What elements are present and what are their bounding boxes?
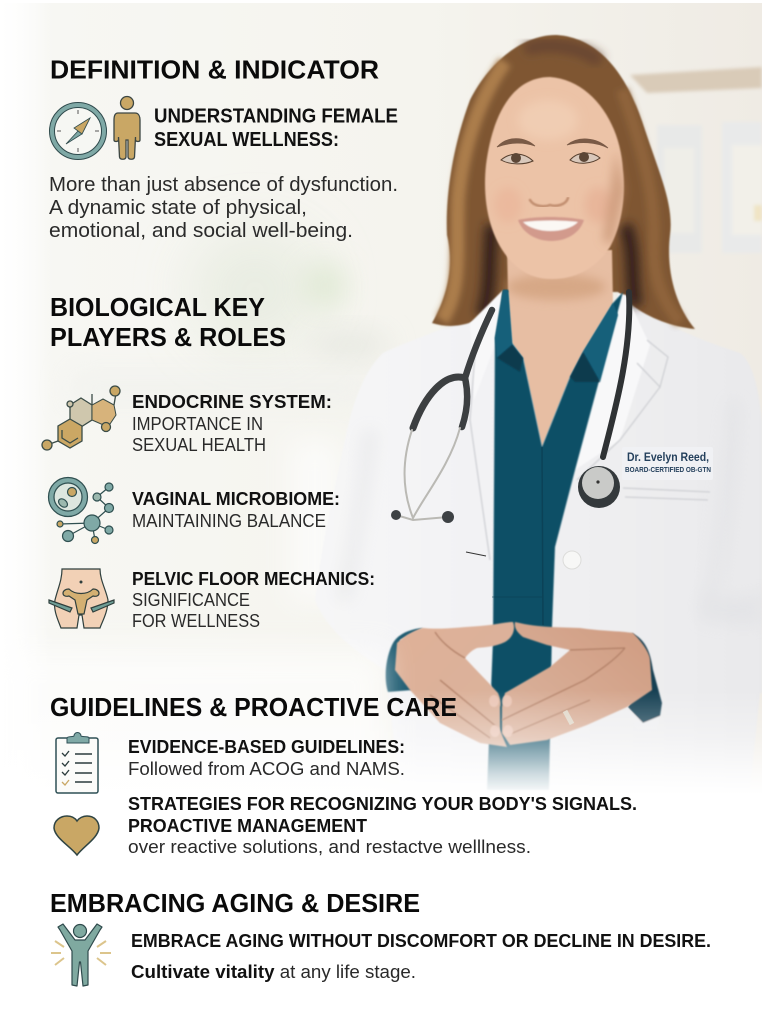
left sleeve fade (0, 650, 385, 800)
text: strategies and proactive management: STRATEGIES FOR RECOGNIZING YOUR BODY'S SIGNALS. (128, 793, 637, 814)
eyes and brows (497, 139, 608, 206)
heading: embracing aging and desire: EMBRACING AGING & DESIRE (50, 888, 420, 918)
icon: endocrine molecule (42, 386, 120, 450)
text: wellness definition (49, 173, 398, 242)
subheading: understanding female sexual wellness: SEXUAL WELLNESS: (154, 129, 339, 151)
icon: figure with raised arms (51, 924, 111, 986)
hair (432, 35, 695, 329)
stethoscope (391, 292, 629, 523)
text: endocrine system: IMPORTANCE IN (132, 413, 263, 434)
heading: guidelines and proactive care: GUIDELINES & PROACTIVE CARE (50, 692, 457, 722)
coat (315, 308, 762, 790)
face (485, 77, 624, 279)
text: wellness definition: emotional, and social well-being. (49, 219, 353, 242)
icon: pelvic floor (49, 569, 114, 628)
icon: heart (54, 816, 99, 855)
text: pelvic floor mechanics: FOR WELLNESS (132, 610, 260, 631)
section: guidelines and proactive care (50, 692, 637, 857)
chest piece (578, 466, 620, 508)
heading: definition and indicator: DEFINITION & INDICATOR (50, 54, 379, 84)
hands (395, 622, 652, 747)
text: strategies and proactive management (128, 793, 637, 857)
section: definition and indicator (49, 54, 398, 242)
wall shelf (630, 67, 762, 93)
text: vaginal microbiome (132, 488, 340, 531)
text: vaginal microbiome: MAINTAINING BALANCE (132, 510, 326, 531)
nose (530, 198, 568, 206)
icon: clipboard checklist (56, 732, 98, 793)
text: endocrine system: ENDOCRINE SYSTEM: (132, 391, 332, 412)
blouse (487, 290, 623, 790)
text: cultivate vitality: Cultivate vitality at any life stage. (131, 961, 416, 982)
text: pelvic floor mechanics (132, 568, 375, 631)
fingernails (489, 695, 513, 737)
lower fade to white (0, 690, 764, 795)
icon: compass (50, 102, 106, 160)
name badge: BOARD-CERTIFIED OB-GTN (625, 465, 711, 474)
coat lapel lines (470, 340, 710, 560)
section: biological key players (42, 292, 375, 631)
text: evidence-based guidelines (128, 736, 405, 779)
text: evidence-based guidelines: EVIDENCE-BASED GUIDELINES: (128, 736, 405, 757)
blouse collar (495, 290, 618, 382)
text: pelvic floor mechanics: PELVIC FLOOR MECHANICS: (132, 568, 375, 589)
text: wellness definition: A dynamic state of physical, (49, 196, 307, 219)
face shading (494, 100, 625, 245)
finger details (430, 632, 625, 738)
heading: biological key players and roles: PLAYERS & ROLES (50, 322, 286, 352)
text: strategies and proactive management: PROACTIVE MANAGEMENT (128, 815, 368, 836)
text: evidence-based guidelines: Followed from ACOG and NAMS. (128, 758, 405, 779)
subheading: understanding female sexual wellness: UNDERSTANDING FEMALE (154, 106, 398, 128)
heading: biological key players and roles: BIOLOGICAL KEY (50, 292, 265, 322)
text: endocrine system (132, 391, 332, 455)
heading: biological key players and roles (50, 292, 286, 352)
doctor portrait (315, 35, 762, 790)
wedding ring (565, 711, 572, 724)
text: pelvic floor mechanics: SIGNIFICANCE (132, 589, 250, 610)
text: vaginal microbiome: VAGINAL MICROBIOME: (132, 488, 340, 509)
coat collar (470, 290, 650, 470)
framed pictures on wall (657, 122, 762, 253)
icon: microbiome (48, 478, 114, 544)
cuffs (386, 628, 662, 730)
text: embrace aging: EMBRACE AGING WITHOUT DISCOMFORT OR DECLINE IN DESIRE. (131, 930, 711, 951)
smile (518, 217, 584, 241)
text: strategies and proactive management: over reactive solutions, and restactve welllness. (128, 836, 531, 857)
text: endocrine system: SEXUAL HEALTH (132, 434, 266, 455)
coat shading (335, 400, 762, 625)
coat button (563, 551, 581, 569)
section: embracing aging and desire (50, 888, 711, 986)
icon: person (114, 96, 140, 159)
subheading: understanding female sexual wellness (154, 106, 398, 151)
text: wellness definition: More than just absence of dysfunction. (49, 173, 398, 196)
neck (507, 250, 613, 447)
name badge: Dr. Evelyn Reed, (627, 452, 709, 464)
name badge (622, 447, 713, 480)
